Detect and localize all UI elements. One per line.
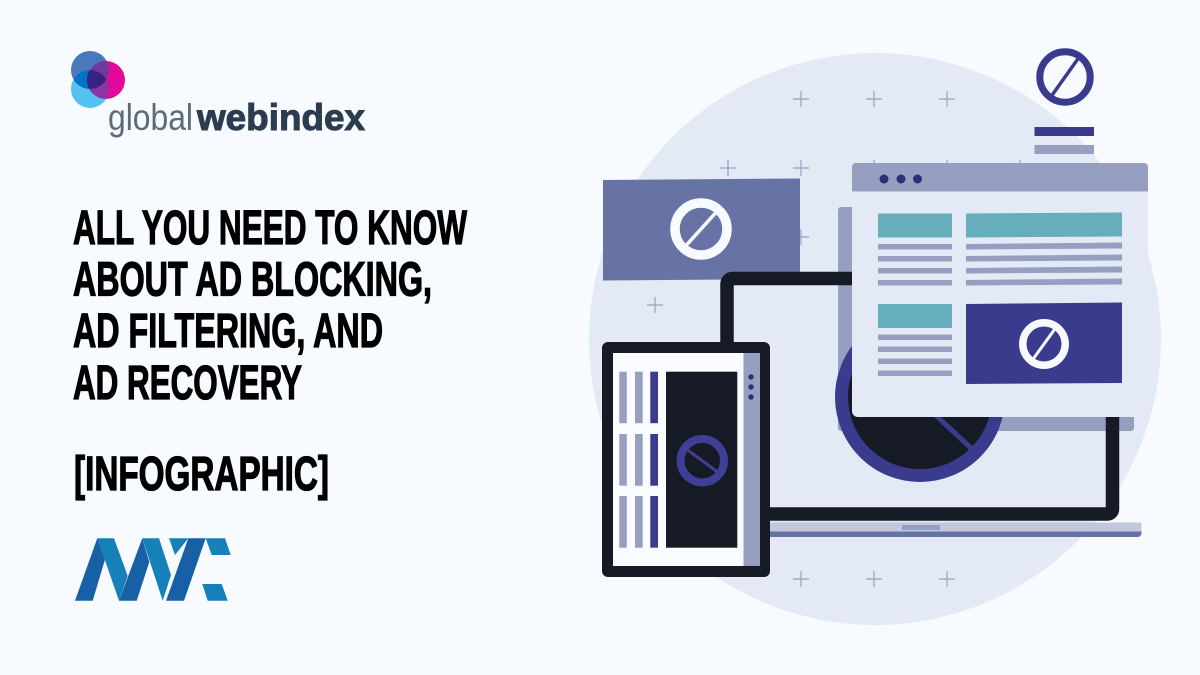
tablet dots — [748, 374, 754, 400]
tablet list — [619, 372, 658, 548]
disc with block symbol — [842, 318, 998, 476]
top block icon — [1034, 52, 1094, 154]
window shadow — [838, 207, 1134, 431]
tablet — [602, 342, 770, 577]
title line 3: AD FILTERING, AND — [73, 304, 383, 358]
blocked ad — [966, 302, 1122, 384]
plus pattern — [647, 91, 1028, 587]
infographic canvas — [71, 48, 1161, 625]
laptop base — [770, 522, 1142, 537]
icon: overlapping circles — [71, 51, 125, 108]
title — [73, 201, 467, 501]
wordmark bold part: webindex — [196, 97, 365, 138]
laptop — [727, 278, 1142, 537]
title line 2: ABOUT AD BLOCKING, — [73, 252, 432, 306]
window dots — [880, 174, 922, 184]
wordmark: global — [108, 97, 193, 138]
ad banner — [603, 178, 800, 280]
article left bottom — [878, 304, 952, 376]
article left top — [878, 214, 952, 286]
title line 1: ALL YOU NEED TO KNOW — [73, 201, 467, 255]
tablet blocked panel — [666, 372, 737, 548]
logo: MTC — [75, 538, 231, 601]
title line 5: [INFOGRAPHIC] — [74, 447, 329, 501]
browser window — [852, 163, 1148, 417]
background circle — [589, 53, 1161, 625]
illustration — [589, 52, 1161, 625]
article right top — [966, 212, 1122, 286]
logo: globalwebindex — [71, 51, 365, 138]
title line 4: AD RECOVERY — [73, 356, 302, 410]
